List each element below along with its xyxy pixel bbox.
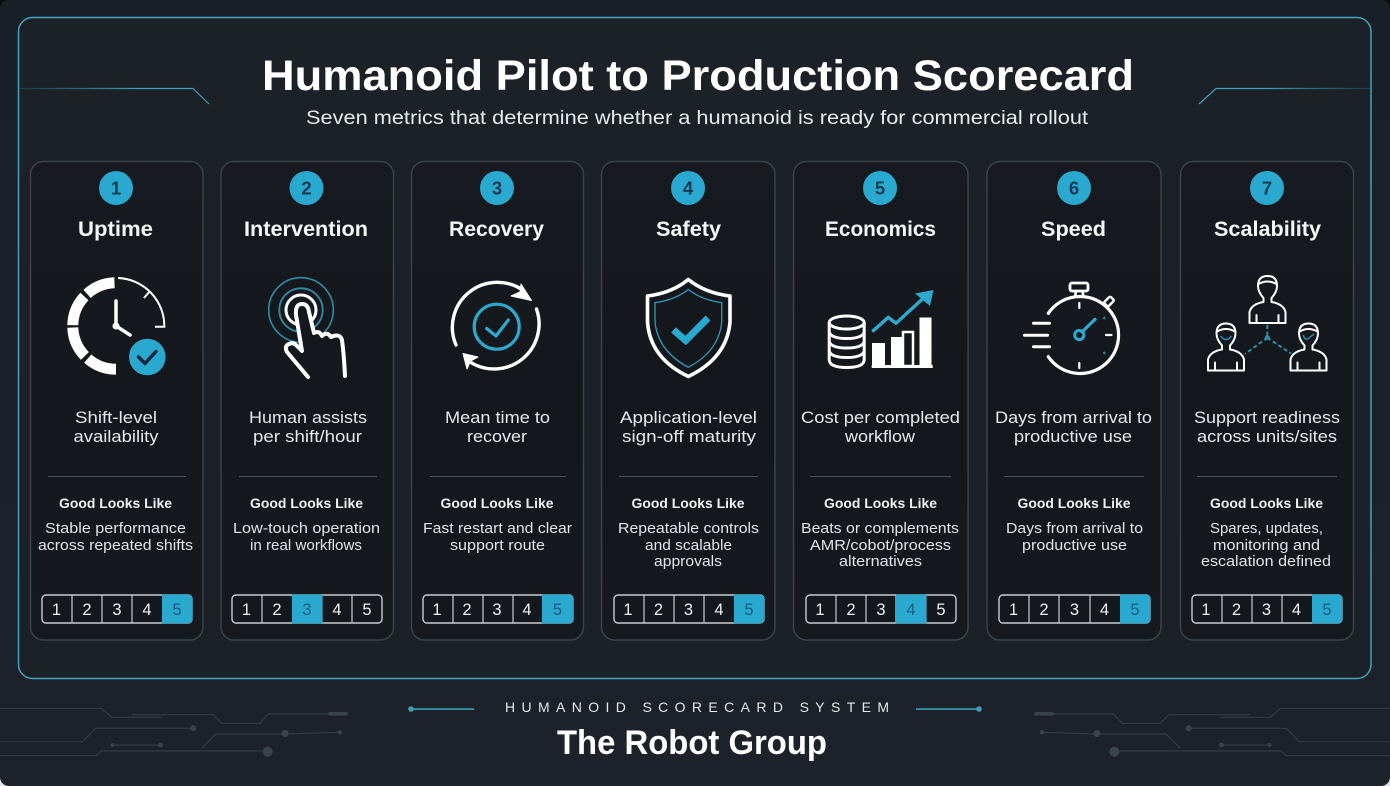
description xyxy=(1194,409,1340,446)
score selector: 5: 1 xyxy=(1201,601,1211,619)
good looks like: and scalable xyxy=(645,538,732,554)
score selector: 5: 5 xyxy=(172,601,182,619)
footer label: HUMANOID SCORECARD SYSTEM xyxy=(505,699,889,715)
icon: networked people xyxy=(1208,276,1326,370)
score selector: 5: 1 xyxy=(623,601,633,619)
panel: intervention xyxy=(221,162,394,640)
footer accent right xyxy=(916,706,982,712)
good looks like: alternatives xyxy=(839,554,922,570)
score selector: 4: 5 xyxy=(936,601,946,619)
score selector: 5 xyxy=(423,594,574,624)
score selector: 5: 2 xyxy=(1232,601,1241,619)
score selector: 5: 2 xyxy=(82,601,92,619)
score selector: 5: 5 xyxy=(1130,601,1140,619)
icon: recovery cycle xyxy=(452,282,539,369)
description xyxy=(995,409,1152,446)
heading: speed: Speed xyxy=(1041,218,1106,241)
good looks like: Good Looks Like xyxy=(59,495,172,511)
number badge 1: 1 xyxy=(111,178,121,198)
panel: scalability xyxy=(1180,162,1354,640)
footer accent left xyxy=(408,706,474,712)
score selector: 5: 1 xyxy=(432,601,442,619)
header accent line right xyxy=(1199,88,1370,104)
number badge 5: 5 xyxy=(875,178,885,198)
score selector: 5 xyxy=(1192,594,1342,624)
good looks like: productive use xyxy=(1022,538,1127,554)
score selector: 3: 5 xyxy=(362,601,372,619)
description: workflow xyxy=(844,428,915,446)
description xyxy=(801,409,960,446)
score selector: 5: 3 xyxy=(1070,601,1079,619)
panel: economics xyxy=(794,162,968,640)
description: sign-off maturity xyxy=(622,428,757,446)
good looks like xyxy=(618,495,759,570)
icon: touch hand xyxy=(269,278,345,377)
good looks like: Good Looks Like xyxy=(440,495,554,511)
score selector: 4: 4 xyxy=(906,601,916,619)
good looks like: Good Looks Like xyxy=(824,495,937,511)
score selector: 4: 1 xyxy=(815,601,825,619)
score selector: 5 xyxy=(614,594,764,624)
score selector: 5: 3 xyxy=(112,601,122,619)
score selector: 5: 4 xyxy=(714,601,724,619)
number badge 2 xyxy=(290,171,324,205)
good looks like: support route xyxy=(450,538,545,554)
good looks like: in real workflows xyxy=(250,538,362,554)
number badge 6 xyxy=(1057,171,1091,205)
number badge 5 xyxy=(863,171,897,205)
score selector: 4: 2 xyxy=(846,601,856,619)
panel: speed xyxy=(987,162,1161,640)
heading: recovery: Recovery xyxy=(449,218,544,241)
score selector: 4: 3 xyxy=(876,601,886,619)
description xyxy=(620,409,757,446)
icon: stopwatch xyxy=(1024,283,1119,374)
score selector: 5 xyxy=(999,594,1150,624)
good looks like: approvals xyxy=(654,554,722,570)
good looks like: Stable performance xyxy=(45,521,186,537)
description: Support readiness xyxy=(1194,409,1340,427)
score selector: 4 xyxy=(806,594,956,624)
good looks like: Good Looks Like xyxy=(1210,495,1323,511)
score selector: 5: 3 xyxy=(492,601,502,619)
score selector: 5: 5 xyxy=(744,601,754,619)
good looks like: across repeated shifts xyxy=(38,538,193,554)
description: Mean time to xyxy=(445,409,550,427)
good looks like xyxy=(423,495,572,554)
description: per shift/hour xyxy=(253,428,363,446)
good looks like: Good Looks Like xyxy=(1018,495,1131,511)
score selector: 5: 4 xyxy=(522,601,532,619)
description xyxy=(74,409,159,446)
score selector: 5: 4 xyxy=(1292,601,1301,619)
score selector: 5: 3 xyxy=(1262,601,1271,619)
score selector: 3: 1 xyxy=(242,601,251,619)
description xyxy=(249,409,367,446)
number badge 7: 7 xyxy=(1262,178,1272,198)
score selector: 3: 3 xyxy=(302,601,312,619)
score selector: 5 xyxy=(42,594,192,624)
description: Cost per completed xyxy=(801,409,960,427)
description: across units/sites xyxy=(1197,428,1337,446)
panel: safety xyxy=(602,162,775,640)
good looks like xyxy=(38,495,193,554)
good looks like: Good Looks Like xyxy=(632,495,745,511)
score selector: 3 xyxy=(232,594,382,624)
score selector: 3: 2 xyxy=(272,601,282,619)
score selector: 5: 1 xyxy=(52,601,61,619)
description: Human assists xyxy=(249,409,367,427)
number badge 6: 6 xyxy=(1069,178,1079,198)
score selector: 5: 5 xyxy=(553,601,562,619)
number badge 7 xyxy=(1250,171,1284,205)
panel: uptime xyxy=(30,162,203,640)
good looks like xyxy=(233,495,380,554)
description: Days from arrival to xyxy=(995,409,1152,427)
description: productive use xyxy=(1014,428,1132,446)
heading: intervention: Intervention xyxy=(244,218,368,241)
good looks like: Low-touch operation xyxy=(233,521,380,537)
number badge 4 xyxy=(671,171,705,205)
panel: recovery xyxy=(412,162,584,640)
good looks like: AMR/cobot/process xyxy=(810,538,951,554)
description xyxy=(445,409,550,446)
number badge 4: 4 xyxy=(683,178,694,198)
good looks like: Repeatable controls xyxy=(618,521,759,537)
good looks like xyxy=(1006,495,1143,554)
good looks like: escalation defined xyxy=(1201,554,1331,570)
heading: scalability: Scalability xyxy=(1214,218,1321,241)
good looks like: Spares, updates, xyxy=(1210,521,1323,537)
heading: safety: Safety xyxy=(656,218,721,241)
good looks like: Days from arrival to xyxy=(1006,521,1143,537)
score selector: 5: 2 xyxy=(462,601,472,619)
good looks like: Fast restart and clear xyxy=(423,521,572,537)
number badge 1 xyxy=(99,171,133,205)
score selector: 5: 4 xyxy=(142,601,152,619)
score selector: 5: 2 xyxy=(654,601,663,619)
title: Humanoid Pilot to Production Scorecard xyxy=(262,52,1134,100)
icon: coins and rising bars xyxy=(829,290,934,368)
score selector: 5: 3 xyxy=(684,601,693,619)
good looks like xyxy=(1201,495,1331,570)
score selector: 5: 5 xyxy=(1322,601,1332,619)
heading: uptime: Uptime xyxy=(78,218,153,241)
brand name: The Robot Group xyxy=(557,724,827,762)
number badge 3 xyxy=(480,171,514,205)
number badge 2: 2 xyxy=(301,178,312,198)
good looks like: Good Looks Like xyxy=(250,495,363,511)
description: Shift-level xyxy=(75,409,157,427)
subtitle: Seven metrics that determine whether a humanoid is ready for commercial rollout xyxy=(306,108,1089,129)
icon: clock with check xyxy=(73,278,166,375)
good looks like xyxy=(801,495,959,570)
score selector: 5: 2 xyxy=(1039,601,1049,619)
score selector: 5: 1 xyxy=(1009,601,1018,619)
number badge 3: 3 xyxy=(492,178,502,198)
good looks like: monitoring and xyxy=(1213,538,1320,554)
description: recover xyxy=(467,428,528,446)
description: Application-level xyxy=(620,409,757,427)
heading: economics: Economics xyxy=(825,218,936,241)
good looks like: Beats or complements xyxy=(801,521,959,537)
circuit traces left xyxy=(0,708,348,757)
description: availability xyxy=(74,428,159,446)
score selector: 3: 4 xyxy=(332,601,342,619)
header accent line left xyxy=(20,88,209,104)
icon: shield check xyxy=(648,280,730,376)
circuit traces right xyxy=(1034,708,1390,757)
score selector: 5: 4 xyxy=(1100,601,1109,619)
